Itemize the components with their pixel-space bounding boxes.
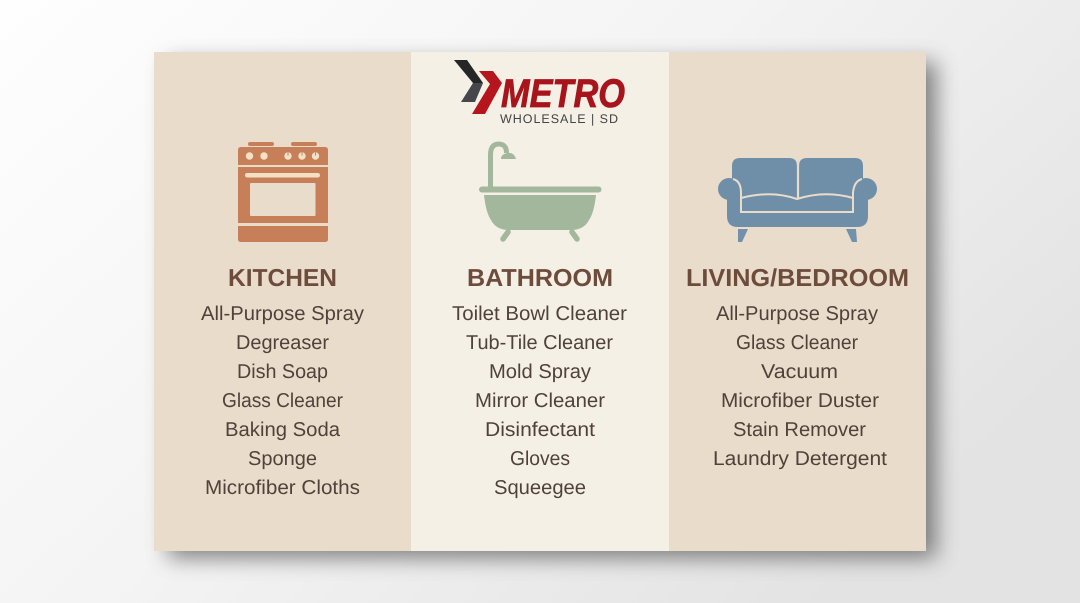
heading: bathroom: BATHROOM: [467, 265, 613, 292]
list: kitchen supplies: Dish Soap: [237, 361, 328, 383]
logo: Metro Wholesale SD: [454, 60, 625, 126]
list: living/bedroom supplies: All-Purpose Spray: [716, 303, 878, 325]
list: bathroom supplies: Gloves: [510, 448, 570, 470]
list: bathroom supplies: [452, 303, 627, 499]
heading: living/bedroom: LIVING/BEDROOM: [686, 265, 909, 292]
list: kitchen supplies: [201, 303, 364, 499]
list: living/bedroom supplies: Microfiber Duster: [721, 390, 879, 412]
list: bathroom supplies: Disinfectant: [485, 419, 595, 441]
icon: bathtub: [479, 144, 602, 239]
list: kitchen supplies: Sponge: [248, 448, 317, 470]
panel: kitchen: [154, 52, 411, 551]
list: kitchen supplies: Degreaser: [236, 332, 329, 354]
list: bathroom supplies: Tub-Tile Cleaner: [466, 332, 613, 354]
list: bathroom supplies: Mold Spray: [489, 361, 591, 383]
panel: living/bedroom: [669, 52, 926, 551]
list: kitchen supplies: Microfiber Cloths: [205, 477, 360, 499]
logo chevrons: [454, 60, 502, 114]
list: living/bedroom supplies: Vacuum: [761, 361, 838, 383]
icon: sofa: [718, 158, 877, 242]
panel: bathroom: [411, 52, 669, 551]
icon: oven: [238, 142, 328, 242]
list: living/bedroom supplies: Laundry Detergent: [713, 448, 887, 470]
list: kitchen supplies: Baking Soda: [225, 419, 341, 441]
list: bathroom supplies: Squeegee: [494, 477, 586, 499]
list: living/bedroom supplies: [713, 303, 887, 470]
list: bathroom supplies: Mirror Cleaner: [475, 390, 605, 412]
list: kitchen supplies: Glass Cleaner: [222, 390, 343, 412]
list: kitchen supplies: All-Purpose Spray: [201, 303, 364, 325]
list: living/bedroom supplies: Glass Cleaner: [736, 332, 858, 354]
list: living/bedroom supplies: Stain Remover: [733, 419, 866, 441]
list: bathroom supplies: Toilet Bowl Cleaner: [452, 303, 627, 325]
heading: kitchen: KITCHEN: [228, 265, 337, 292]
logo tagline: WHOLESALE | SD: [500, 112, 618, 126]
logo wordmark: METRO: [501, 72, 625, 116]
